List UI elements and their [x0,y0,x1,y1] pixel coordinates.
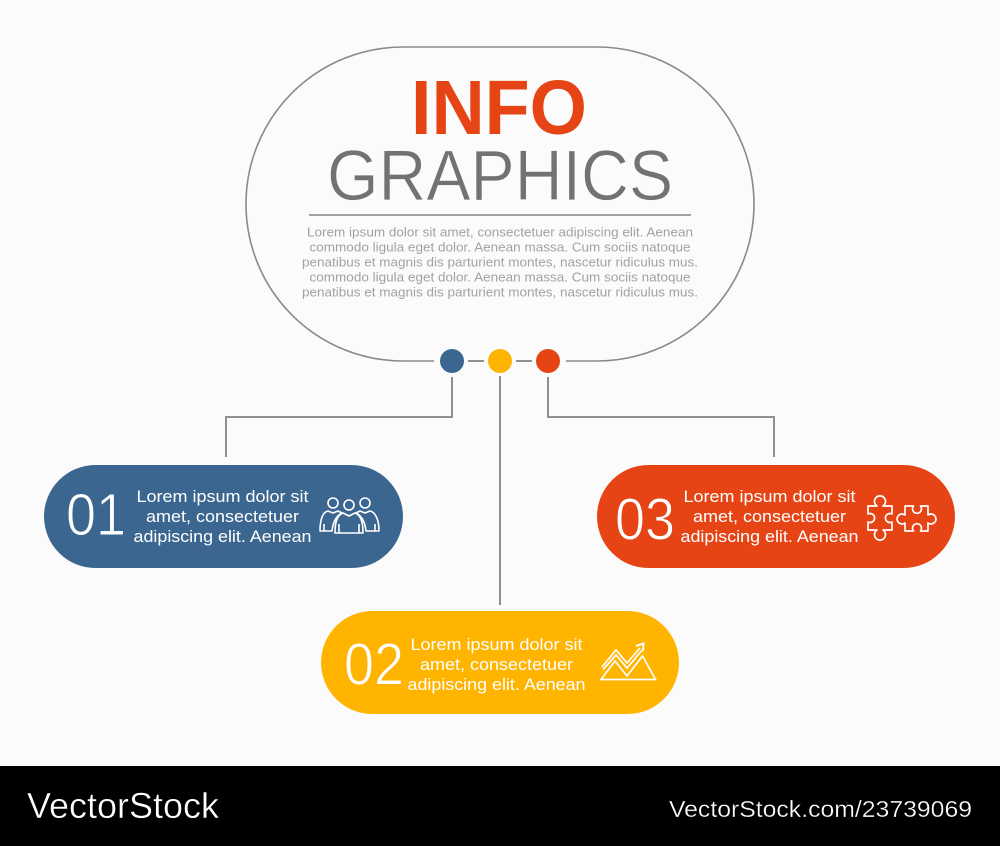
body text: penatibus et magnis dis parturient montes, nascetur ridiculus mus. [302,284,698,300]
step 03 text: adipiscing elit. Aenean [680,528,858,546]
title: GRAPHICS [327,137,673,216]
connector to step 02 [499,376,501,605]
title divider [309,214,691,216]
number 02: 02 [344,632,404,698]
body text: penatibus et magnis dis parturient montes, nascetur ridiculus mus. [302,254,698,270]
step 02 text: amet, consectetuer [420,656,574,674]
icon: chart mountains [601,644,656,680]
connector to step 03 [548,377,774,457]
footer url text: VectorStock.com/23739069 [669,796,972,822]
icon: people [320,498,379,533]
panel: step 01 [44,465,403,568]
footer logo text: VectorStock [27,785,220,826]
number 03: 03 [615,486,675,552]
step 03 text: Lorem ipsum dolor sit [684,488,856,506]
step 02 text: adipiscing elit. Aenean [408,676,586,694]
step 01 text: adipiscing elit. Aenean [134,528,312,546]
body text: commodo ligula eget dolor. Aenean massa. Cum sociis natoque [310,240,690,254]
dot connectors [468,360,532,362]
rounded outline panel [246,47,754,361]
step 03 text: amet, consectetuer [693,508,847,526]
body text: commodo ligula eget dolor. Aenean massa. Cum sociis natoque [310,270,690,284]
dot: blue [440,349,464,373]
step 02 text: Lorem ipsum dolor sit [410,636,583,654]
connector to step 01 [226,377,452,457]
footer bar [0,766,1000,846]
step 01 text: amet, consectetuer [146,508,300,526]
dot: orange [536,349,560,373]
dot: yellow [488,349,512,373]
panel: step 03 [597,465,955,568]
title [327,65,673,216]
icon: puzzle pieces [868,496,936,540]
panel: step 02 [321,611,679,714]
step 03 text [680,488,858,546]
number 01: 01 [66,482,126,548]
body text: Lorem ipsum dolor sit amet, consectetuer adipiscing elit. Aenean [307,224,693,240]
title: INFO [411,65,587,151]
step 01 text [134,488,312,546]
step 02 text [408,636,586,694]
step 01 text: Lorem ipsum dolor sit [136,488,309,506]
body text [302,224,698,300]
